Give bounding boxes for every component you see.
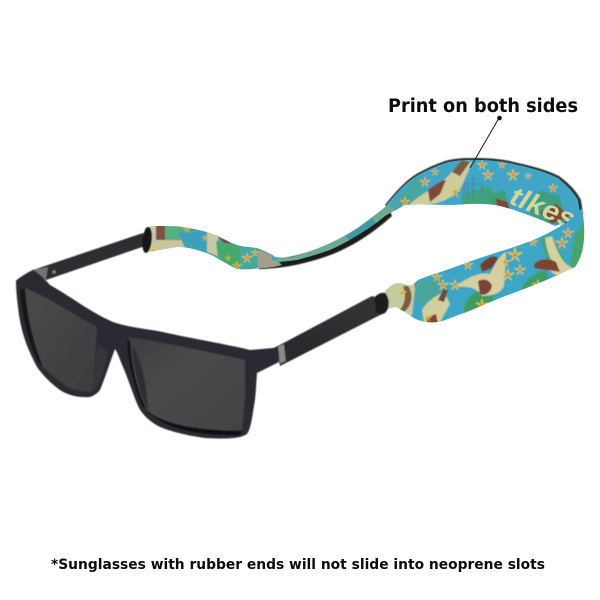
footnote: *Sunglasses with rubber ends will not slide into neoprene slots — [51, 557, 545, 573]
callout leader line — [470, 116, 502, 168]
sloth 2 — [545, 236, 575, 276]
near temple arm — [276, 293, 389, 366]
strap: inner printed face — [272, 157, 584, 262]
strap: near outer band — [385, 208, 584, 322]
dark strap edge — [258, 206, 392, 269]
sloth on inner face — [410, 160, 472, 206]
strap logo text: tlkes — [506, 181, 580, 234]
printed logo marks — [464, 177, 482, 197]
flowers — [507, 247, 523, 262]
strap: far sleeve and connecting band — [145, 212, 393, 270]
rubber end knob — [374, 293, 389, 314]
sloth 1 — [458, 252, 506, 296]
sunglasses frame — [16, 270, 286, 439]
greens — [463, 291, 494, 313]
callout heading: Print on both sides — [388, 96, 578, 117]
right lens — [128, 337, 245, 431]
sloth 3 — [422, 292, 450, 322]
metal hinge band — [278, 344, 286, 364]
left lens — [25, 288, 97, 392]
neck — [383, 280, 416, 316]
far temple arm — [32, 227, 153, 281]
rubber end — [141, 227, 153, 253]
far sleeve print — [145, 226, 282, 270]
